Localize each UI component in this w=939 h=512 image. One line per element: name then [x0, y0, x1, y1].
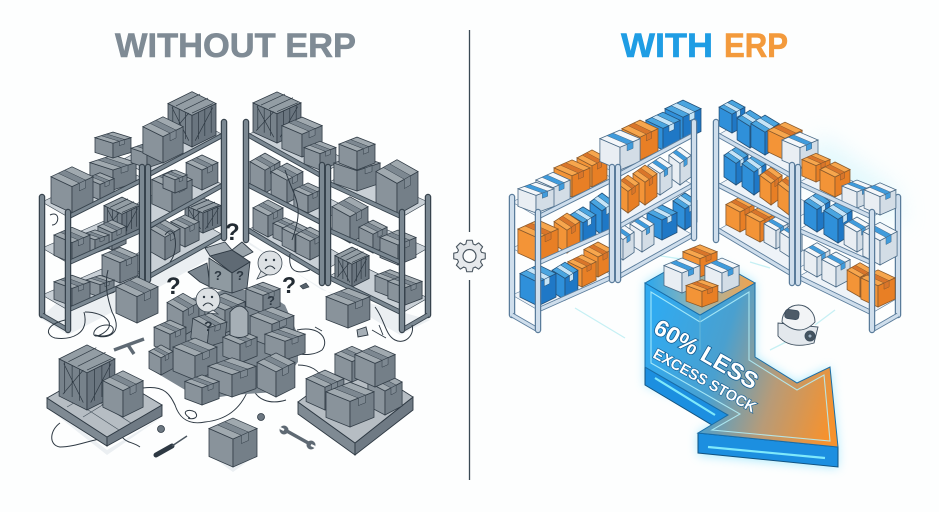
question marks: ?	[225, 219, 240, 246]
shelf front posts and beams	[512, 122, 898, 330]
panel: with ERP warehouse	[512, 100, 905, 468]
loose floor box	[209, 418, 257, 467]
tangled cables	[48, 170, 413, 447]
question marks: ?	[166, 273, 181, 300]
boxes on arrow	[683, 245, 717, 277]
floor guide lines	[575, 255, 835, 350]
title: With ERP: ERP	[724, 27, 788, 65]
panel: without ERP warehouse	[40, 92, 430, 472]
arrow side faces	[645, 367, 838, 467]
open box	[188, 242, 253, 293]
question marks	[166, 219, 296, 334]
right pallet with boxes	[298, 346, 413, 455]
callout arrow: 60% less excess stock	[645, 245, 838, 468]
arrow platform top	[645, 252, 755, 315]
title: With ERP: WITH	[621, 27, 713, 65]
sad face bubbles	[196, 251, 282, 314]
arrow label: 60% less: 60% LESS	[650, 314, 763, 394]
ambient cyan glow	[800, 135, 905, 225]
shelving units, colour coded	[512, 120, 898, 315]
floor shadows	[40, 235, 430, 472]
icon: gear	[454, 240, 485, 272]
arrow top face	[645, 283, 838, 447]
left and right shelving units, gray	[42, 92, 428, 330]
question marks: ?	[236, 268, 244, 283]
tape dispenser	[230, 306, 248, 338]
question marks: ?	[204, 318, 213, 334]
question marks: ?	[214, 268, 222, 283]
question marks: ?	[282, 272, 296, 298]
arrow label: excess stock: EXCESS STOCK	[650, 346, 759, 416]
center divider	[468, 30, 470, 480]
organised boxes on shelves	[518, 100, 897, 307]
arrow glow	[645, 252, 838, 468]
pile of boxes with confusion	[149, 242, 305, 405]
robot	[778, 305, 818, 345]
title: Without ERP: WITHOUT ERP	[115, 27, 356, 65]
pile backing	[155, 290, 298, 400]
title: With ERP	[621, 27, 788, 65]
scattered tools	[114, 283, 386, 455]
question marks: ?	[267, 293, 275, 308]
left pallet with crate	[47, 345, 162, 446]
